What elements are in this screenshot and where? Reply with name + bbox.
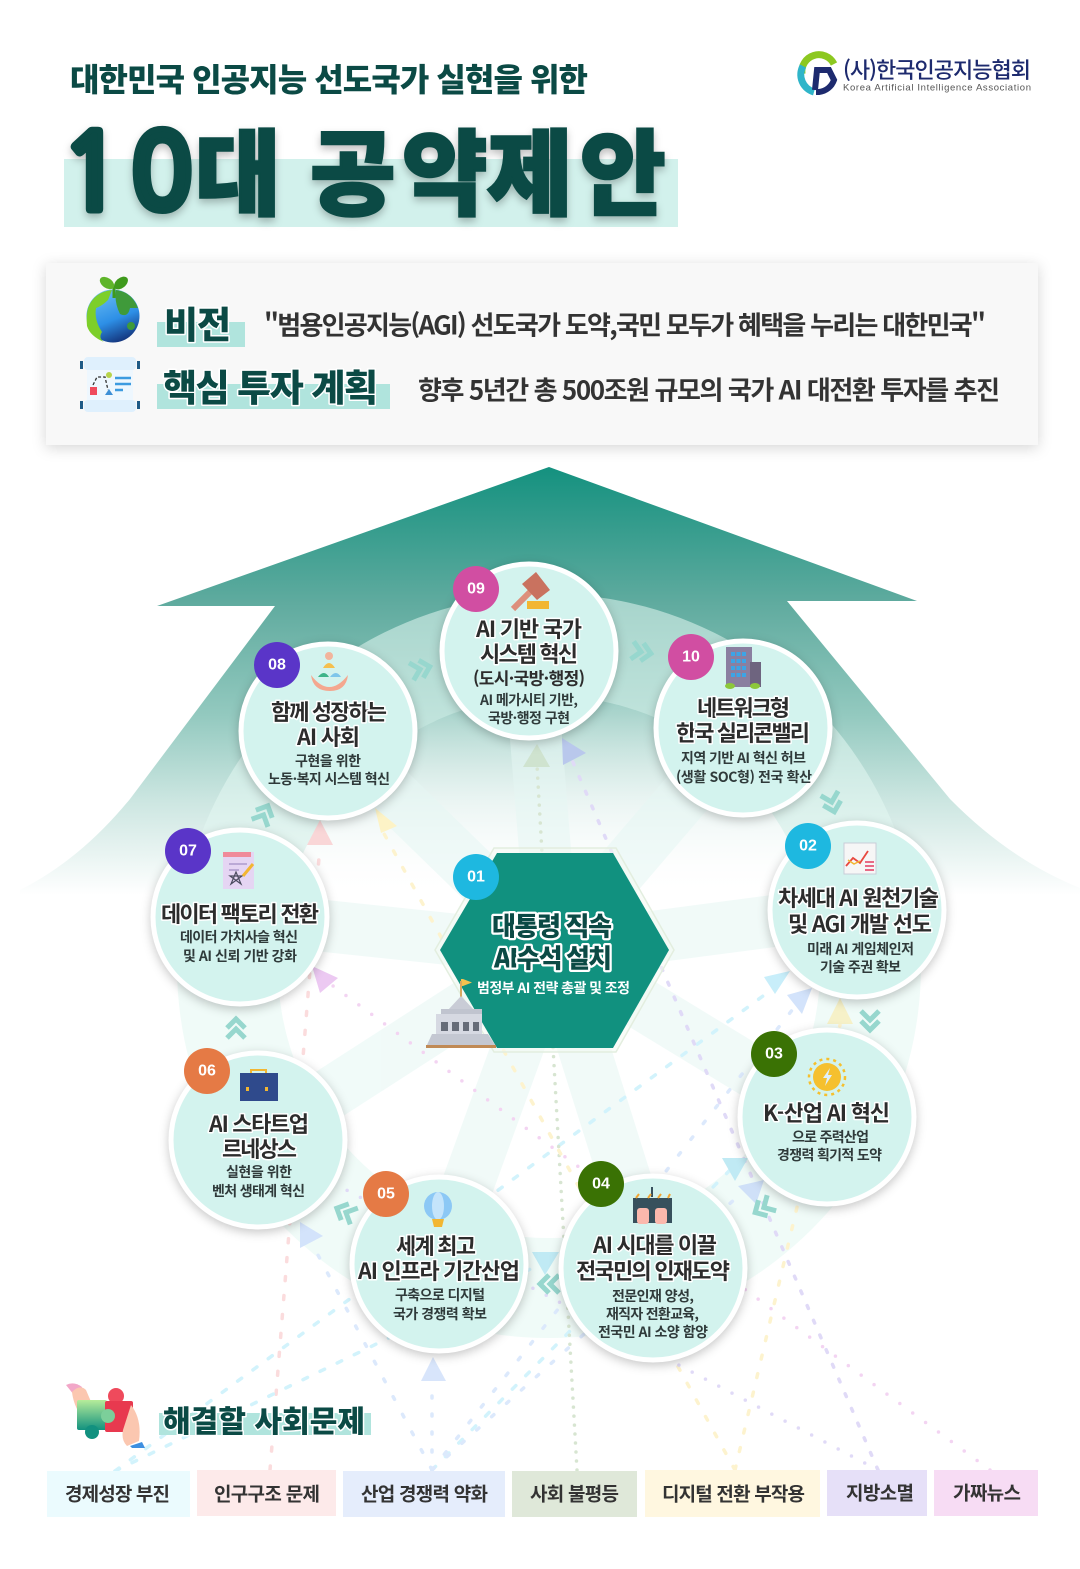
node 05: AI 인프라 기간산업	[357, 1254, 520, 1286]
node 02: 및 AGI 개발 선도	[788, 907, 932, 939]
node 09: AI 메가시티 기반,	[479, 690, 578, 710]
node 10: 지역 기반 AI 혁신 허브	[681, 748, 806, 768]
icon: light bulb	[424, 1192, 452, 1227]
badge 10	[668, 634, 714, 680]
node 04: 전국민의 인재도약	[576, 1254, 730, 1286]
node 08: 구현을 위한	[295, 751, 361, 771]
badge 04	[578, 1161, 624, 1207]
node 10: 한국 실리콘밸리	[676, 716, 810, 748]
node 03: K-산업 AI 혁신	[763, 1096, 890, 1128]
label: 경제성장 부진	[47, 1471, 190, 1517]
label: 사회 불평등	[512, 1471, 637, 1517]
label: 사회 불평등: 사회 불평등	[530, 1480, 619, 1506]
hexagon: 01 presidential AI secretary: 범정부 AI 전략 총괄 및 조정	[477, 978, 630, 998]
node 09: AI 기반 국가	[475, 612, 582, 644]
badge 03	[751, 1031, 797, 1077]
panel: vision and investment plan	[46, 263, 1038, 445]
node 08	[241, 642, 415, 818]
node 06: 르네상스	[222, 1132, 297, 1164]
icon: sun with bolt	[809, 1059, 845, 1095]
icon: puzzle and hands	[66, 1383, 145, 1448]
logo: Korea Artificial Intelligence Association	[801, 53, 1031, 94]
badge 08: 08	[268, 656, 286, 674]
icon: document and pencil	[223, 852, 254, 889]
subtitle: 대한민국 인공지능 선도국가 실현을 위한	[70, 55, 588, 101]
badge 06	[184, 1048, 230, 1094]
label: 가짜뉴스: 가짜뉴스	[953, 1478, 1021, 1506]
node 10: 네트워크형	[697, 691, 790, 723]
badge 05: 05	[377, 1186, 395, 1202]
label: 지방소멸	[827, 1470, 927, 1516]
badge 09	[453, 566, 499, 612]
label: 산업 경쟁력 약화	[343, 1471, 505, 1517]
node 08: AI 사회	[296, 720, 360, 752]
node 09: 시스템 혁신	[480, 637, 578, 669]
icon: growth chart	[844, 843, 876, 874]
node 04: AI 시대를 이끌	[592, 1228, 717, 1260]
logo: Korea Artificial Intelligence Association: Korea Artificial Intelligence Association	[843, 82, 1031, 94]
node 10: (생활 SOC형) 전국 확산	[676, 767, 812, 787]
heading: vision: 비전	[164, 295, 231, 349]
node 10	[656, 634, 830, 815]
cycle chevrons between pledges	[227, 641, 879, 1293]
problem labels	[47, 1470, 1038, 1517]
node 06: AI 스타트업	[208, 1107, 309, 1139]
node 08: 노동·복지 시스템 혁신	[268, 769, 390, 789]
label: 지방소멸: 지방소멸	[846, 1478, 914, 1506]
logo: Korea Artificial Intelligence Association: (사)한국인공지능협회	[843, 53, 1031, 85]
node 02	[770, 823, 944, 997]
node 04	[561, 1161, 745, 1360]
icon: plan scroll	[80, 357, 140, 412]
hexagon: 01 presidential AI secretary: AI수석 설치	[493, 938, 612, 976]
node 07: 데이터 팩토리 전환	[161, 897, 319, 929]
node 06: 벤처 생태계 혁신	[212, 1181, 305, 1201]
node 04: 재직자 전환교육,	[606, 1304, 699, 1324]
node 05: 국가 경쟁력 확보	[393, 1304, 487, 1324]
icon: national assembly building	[426, 979, 496, 1048]
node 04: 전문인재 양성,	[612, 1286, 694, 1306]
badge 07: 07	[179, 842, 197, 860]
node 05: 세계 최고	[396, 1229, 476, 1261]
node 03: 으로 주력산업	[792, 1127, 869, 1147]
badge 01: 01	[467, 868, 485, 886]
node 07: 및 AI 신뢰 기반 강화	[183, 946, 297, 966]
node 09: 국방·행정 구현	[488, 708, 570, 728]
vision statement: "범용인공지능(AGI) 선도국가 도약,국민 모두가 혜택을 누리는 대한민국"	[264, 306, 986, 342]
label: 가짜뉴스	[934, 1470, 1038, 1516]
label: 디지털 전환 부작용	[645, 1470, 820, 1517]
badge 02: 02	[799, 838, 817, 854]
big upward arrow background	[20, 467, 1080, 900]
label: 경제성장 부진: 경제성장 부진	[65, 1480, 170, 1506]
heading: social problems to solve: 해결할 사회문제	[163, 1397, 365, 1441]
node 07	[153, 828, 327, 1004]
heading: core investment plan: 핵심 투자 계획	[163, 358, 378, 412]
node 02: 미래 AI 게임체인저	[807, 939, 914, 959]
node 08: 함께 성장하는	[271, 695, 387, 727]
badge 01	[453, 854, 499, 900]
dotted links from social problems to pledges	[115, 760, 990, 1471]
node 05	[352, 1171, 526, 1351]
icon: gavel	[513, 572, 550, 609]
link arrowheads	[300, 738, 853, 1381]
icon: office building	[725, 647, 761, 689]
hexagon: 01 presidential AI secretary	[426, 848, 674, 1052]
investment statement: 향후 5년간 총 500조원 규모의 국가 AI 대전환 투자를 추진	[418, 370, 1000, 408]
node 03	[740, 1030, 914, 1204]
badge 08	[254, 642, 300, 688]
label: 인구구조 문제	[197, 1470, 336, 1516]
icon: hands on keyboard	[633, 1187, 672, 1224]
node 06: 실현을 위한	[226, 1162, 292, 1182]
badge 07	[165, 828, 211, 874]
icon: briefcase	[240, 1070, 278, 1101]
badge 10: 10	[682, 648, 700, 666]
badge 02	[785, 823, 831, 869]
icon: people in hands	[311, 652, 348, 691]
label: 디지털 전환 부작용: 디지털 전환 부작용	[662, 1480, 805, 1506]
badge 06: 06	[198, 1062, 216, 1080]
node 05: 구축으로 디지털	[395, 1285, 485, 1305]
title with highlight: 대공약제안	[195, 100, 666, 234]
node 06	[171, 1048, 345, 1227]
node 07: 데이터 가치사슬 혁신	[180, 927, 298, 947]
node 03: 경쟁력 획기적 도약	[777, 1145, 882, 1165]
title with highlight: 10	[60, 121, 194, 226]
node 02: 차세대 AI 원천기술	[778, 881, 939, 913]
node 04: 전국민 AI 소양 함양	[598, 1322, 708, 1342]
badge 09: 09	[467, 580, 485, 598]
node 09: (도시·국방·행정)	[473, 664, 585, 690]
label: 인구구조 문제: 인구구조 문제	[214, 1480, 320, 1506]
ring and spokes behind the nodes	[177, 594, 921, 1338]
badge 04: 04	[592, 1176, 610, 1192]
node 02: 기술 주권 확보	[820, 957, 901, 977]
badge 05	[363, 1171, 409, 1217]
icon: globe with sprout	[86, 274, 140, 342]
badge 03: 03	[765, 1046, 783, 1062]
hexagon: 01 presidential AI secretary: 대통령 직속	[492, 906, 612, 944]
label: 산업 경쟁력 약화: 산업 경쟁력 약화	[361, 1480, 488, 1506]
node 09	[442, 564, 616, 738]
